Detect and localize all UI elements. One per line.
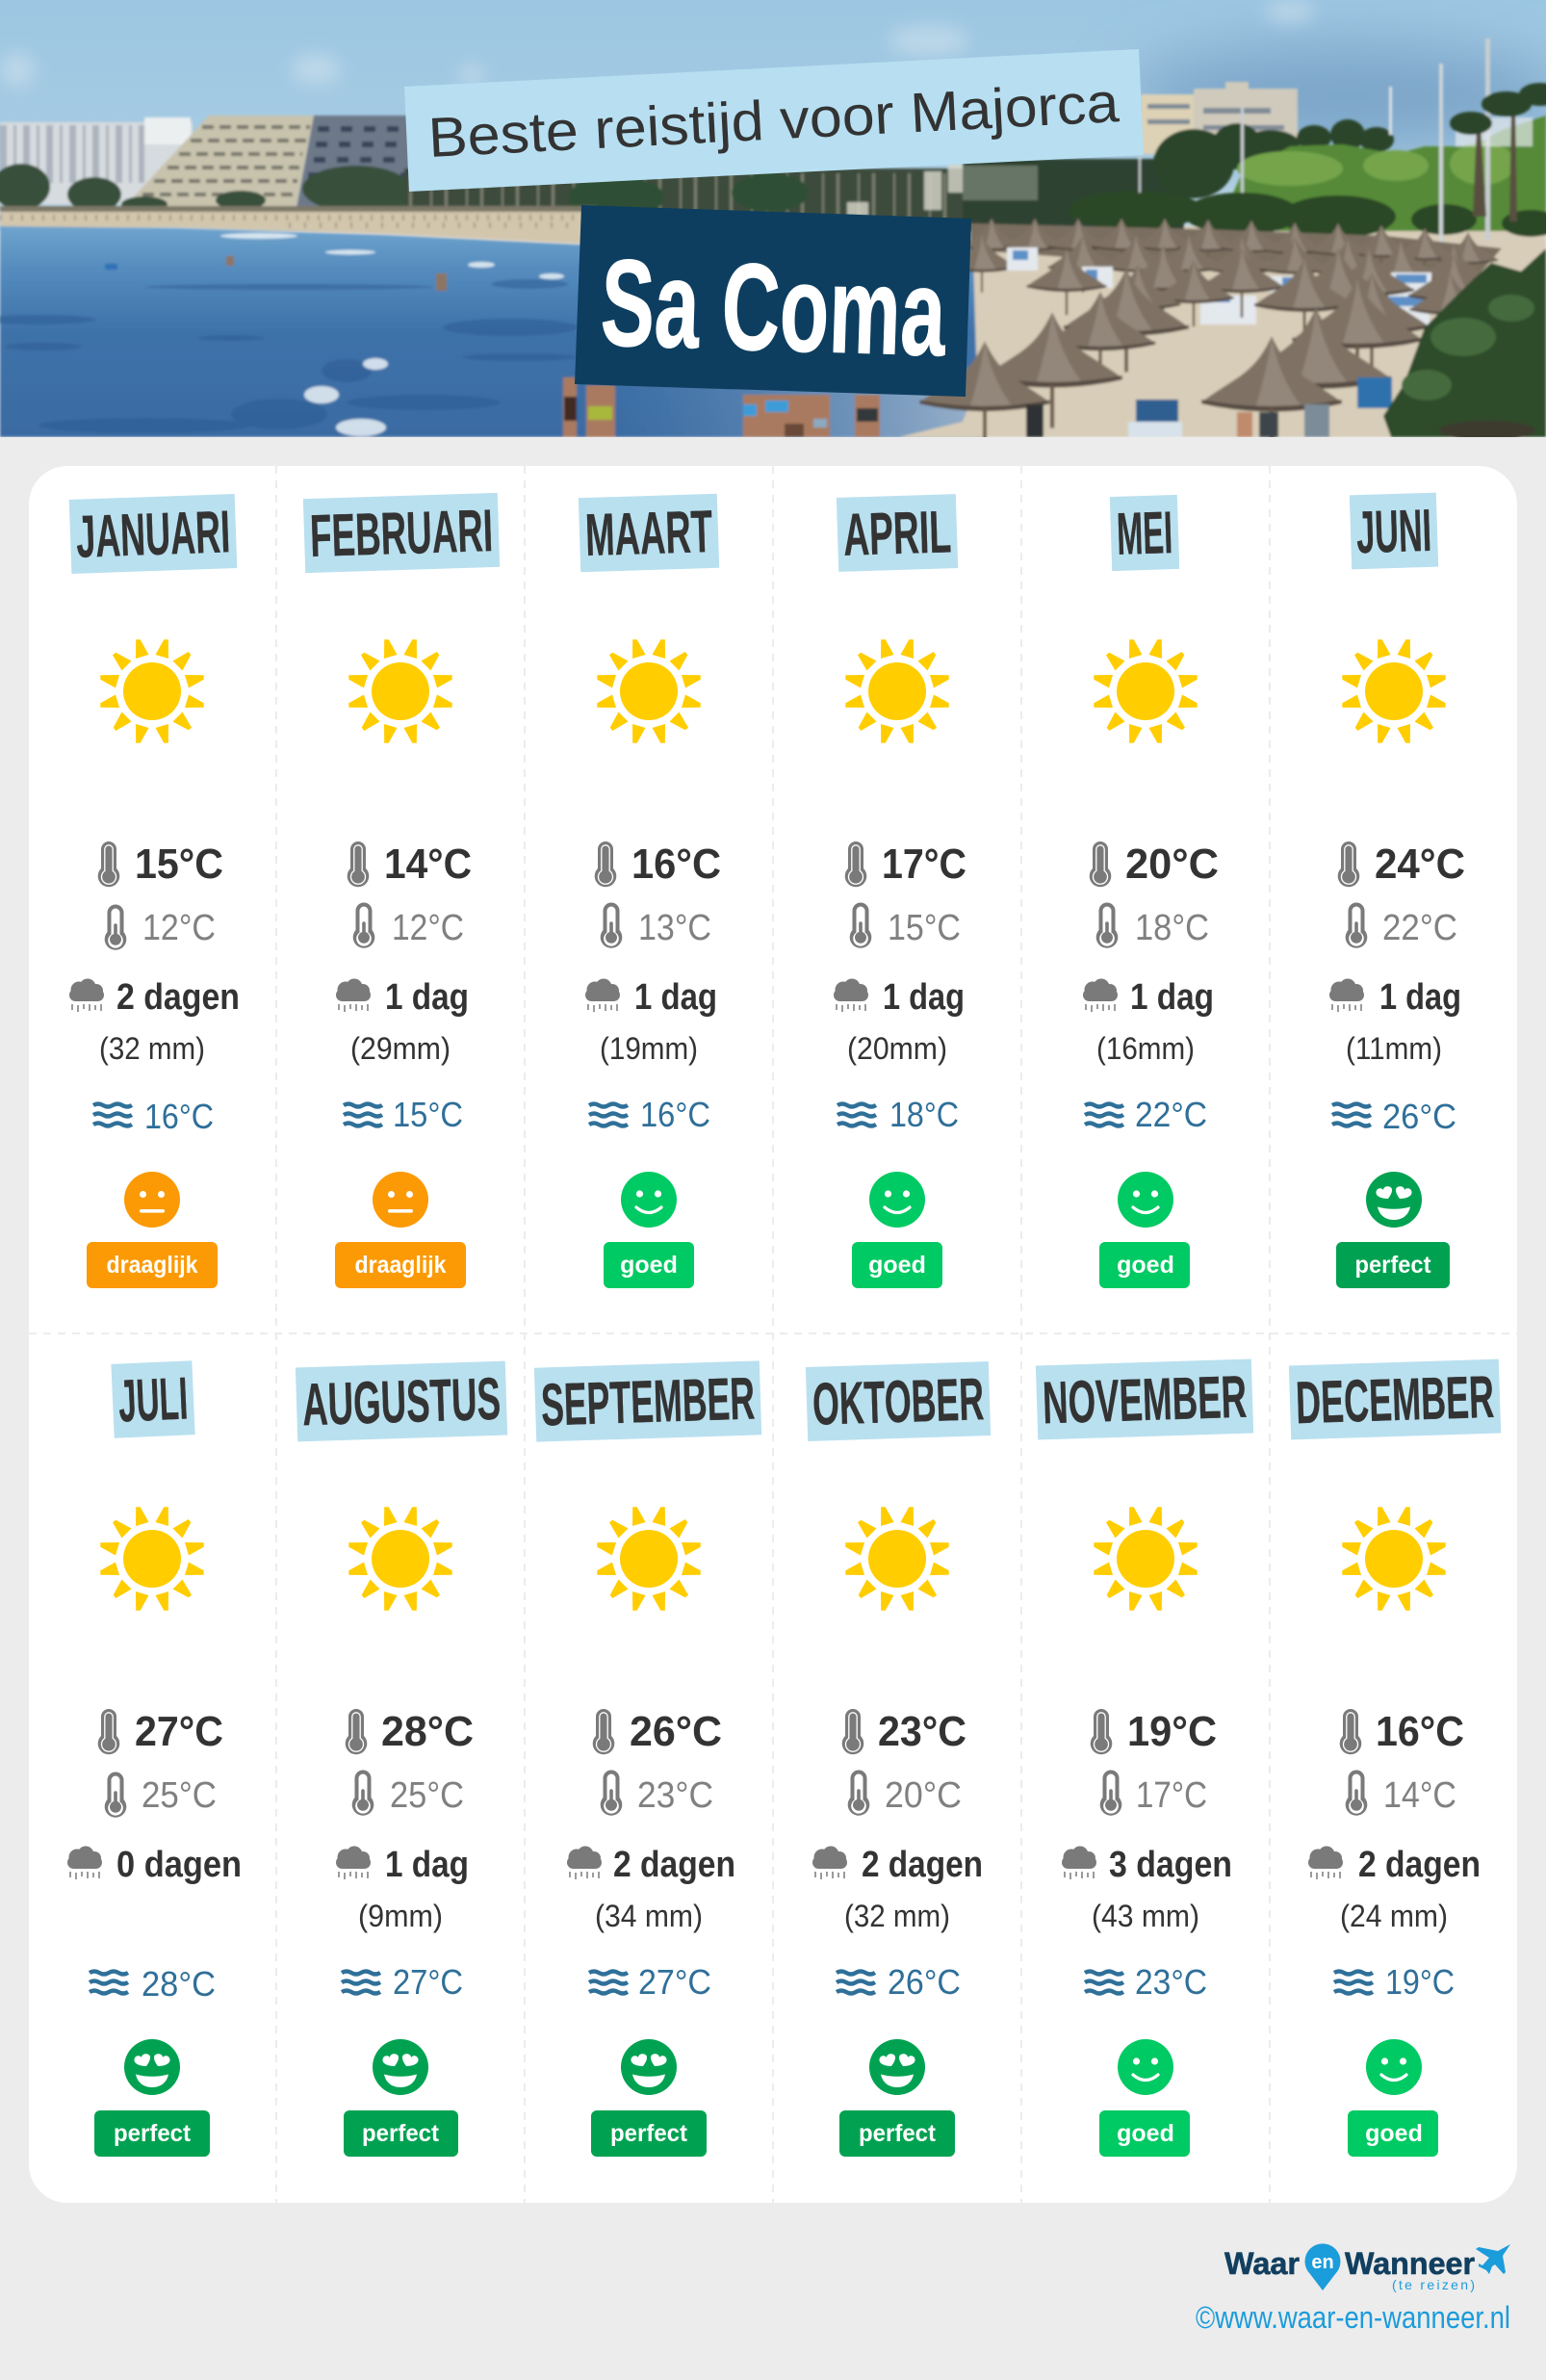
min temperature: 23°C — [637, 1775, 713, 1816]
main panel — [29, 466, 1517, 2203]
rating: goed — [852, 1172, 942, 1288]
rainfall: (32 mm) — [844, 1899, 950, 1933]
sea temperature: 28°C — [142, 1964, 216, 2004]
rating: draaglijk: draaglijk — [106, 1252, 198, 1279]
icon: map pin — [1305, 2243, 1340, 2290]
month label: JANUARI — [75, 499, 231, 571]
month label: FEBRUARI — [309, 498, 494, 570]
sea temperature — [837, 1962, 961, 2002]
min temperature — [850, 903, 961, 948]
people — [563, 377, 880, 437]
month label: JUNI — [1355, 498, 1432, 566]
month: juni — [1329, 493, 1465, 1288]
logo: Waar en Wanneer: (te reizen) — [1392, 2277, 1475, 2292]
rain days: 1 dag — [1379, 977, 1461, 1018]
rating: perfect — [591, 2039, 707, 2157]
title banner: Beste reistijd voor Majorca — [426, 71, 1121, 169]
icon: sun — [845, 1507, 949, 1611]
beach — [0, 212, 597, 245]
icon: map pin: en — [1311, 2252, 1334, 2273]
rating: perfect: perfect — [610, 2120, 688, 2147]
sea temperature — [1334, 1962, 1455, 2002]
rain days — [812, 1845, 983, 1885]
min temperature — [352, 1770, 464, 1816]
max temperature — [842, 1708, 966, 1755]
month: december — [1289, 1359, 1501, 2157]
icon: sun — [100, 1507, 204, 1611]
rain days: 1 dag — [385, 977, 469, 1018]
month label — [534, 1360, 761, 1442]
sea temperature — [589, 1095, 710, 1134]
rain days — [834, 977, 965, 1018]
month: september — [534, 1360, 761, 2157]
max temperature: 14°C — [384, 841, 472, 888]
sea temperature — [589, 1962, 711, 2002]
month label: AUGUSTUS — [301, 1366, 502, 1438]
rating: perfect — [94, 2039, 210, 2157]
min temperature: 22°C — [1382, 908, 1457, 948]
month label — [296, 1361, 507, 1441]
max temperature — [98, 841, 223, 888]
hotels left — [0, 122, 193, 204]
rating: perfect — [1336, 1172, 1450, 1288]
location banner: Sa Coma — [575, 205, 971, 397]
sea temperature: 18°C — [889, 1095, 959, 1134]
rating: goed: goed — [1117, 1252, 1174, 1279]
rating: draaglijk: draaglijk — [354, 1252, 447, 1279]
rating: perfect: perfect — [1355, 1252, 1431, 1279]
rating: goed — [1348, 2039, 1438, 2157]
min temperature — [848, 1770, 962, 1816]
sea temperature: 22°C — [1135, 1095, 1207, 1134]
month label — [837, 494, 958, 572]
sea — [0, 226, 992, 437]
min temperature: 20°C — [885, 1775, 962, 1816]
max temperature: 19°C — [1127, 1708, 1217, 1755]
rain days: 2 dagen — [1358, 1845, 1481, 1885]
logo: Waar en Wanneer — [1224, 2243, 1510, 2292]
rainfall: (16mm) — [1096, 1031, 1195, 1066]
rain days — [1308, 1845, 1481, 1885]
min temperature — [601, 1770, 713, 1816]
rain days: 3 dagen — [1109, 1845, 1232, 1885]
min temperature: 18°C — [1135, 908, 1209, 948]
max temperature: 16°C — [631, 841, 721, 888]
sea temperature: 27°C — [393, 1962, 463, 2002]
sea temperature: 16°C — [144, 1097, 214, 1136]
rating: perfect — [839, 2039, 955, 2157]
min temperature — [1100, 1770, 1207, 1816]
rating: draaglijk — [335, 1172, 466, 1288]
rain days — [67, 1845, 242, 1885]
max temperature: 26°C — [630, 1708, 722, 1755]
max temperature: 20°C — [1125, 841, 1219, 888]
rain days — [336, 977, 469, 1018]
month label: NOVEMBER — [1042, 1364, 1248, 1436]
rain days — [1062, 1845, 1232, 1885]
icon: sun — [1094, 639, 1198, 743]
max temperature: 15°C — [135, 841, 223, 888]
max temperature — [595, 841, 721, 888]
min temperature: 13°C — [638, 908, 711, 948]
month: februari — [303, 493, 500, 1288]
min temperature — [105, 1772, 217, 1818]
min temperature: 14°C — [1383, 1775, 1456, 1816]
rain days — [567, 1845, 735, 1885]
rating: goed: goed — [1117, 2120, 1174, 2147]
month: januari — [69, 494, 240, 1288]
sea temperature: 26°C — [1382, 1097, 1456, 1136]
max temperature — [1338, 841, 1465, 888]
header photo: beach of Sa Coma — [0, 0, 1546, 453]
sea temperature: 23°C — [1135, 1962, 1207, 2002]
max temperature — [845, 841, 966, 888]
building and trees right — [899, 226, 1546, 437]
icon: sun — [845, 639, 949, 743]
sea temperature — [837, 1095, 959, 1134]
rain days: 1 dag — [1130, 977, 1214, 1018]
rain days — [585, 977, 717, 1018]
parasol mass — [970, 223, 1502, 281]
rain days: 2 dagen — [862, 1845, 983, 1885]
icon: sun — [1342, 1507, 1446, 1611]
min temperature — [353, 903, 464, 948]
month: april — [834, 494, 966, 1288]
icon: sun — [1342, 639, 1446, 743]
title banner — [404, 49, 1144, 192]
rainfall: (9mm) — [358, 1899, 443, 1933]
max temperature — [1091, 1708, 1217, 1755]
max temperature — [1340, 1708, 1464, 1755]
month: november — [1036, 1359, 1253, 2157]
max temperature: 16°C — [1376, 1708, 1464, 1755]
min temperature: 17°C — [1136, 1775, 1207, 1816]
sea temperature: 15°C — [393, 1095, 463, 1134]
rain days: 2 dagen — [116, 977, 240, 1018]
sea temperature: 26°C — [888, 1962, 961, 2002]
palm strip behind banner — [404, 168, 1174, 226]
month label — [303, 493, 500, 573]
sea temperature — [90, 1964, 216, 2004]
rating: draaglijk — [87, 1172, 218, 1288]
rainfall: (43 mm) — [1092, 1899, 1199, 1933]
sea temperature — [1085, 1095, 1207, 1134]
sea temperature — [344, 1095, 463, 1134]
month label — [1350, 493, 1438, 569]
icon: sun — [597, 639, 701, 743]
max temperature: 28°C — [381, 1708, 474, 1755]
sea temperature: 16°C — [640, 1095, 710, 1134]
max temperature — [348, 841, 472, 888]
rating: goed: goed — [620, 1252, 678, 1279]
min temperature: 25°C — [390, 1775, 464, 1816]
month: augustus — [296, 1361, 507, 2157]
rainfall: (11mm) — [1346, 1031, 1442, 1066]
rating: goed: goed — [868, 1252, 926, 1279]
rain days: 1 dag — [385, 1845, 469, 1885]
rain days: 2 dagen — [613, 1845, 735, 1885]
min temperature — [105, 905, 216, 950]
rain days — [1083, 977, 1214, 1018]
sea temperature — [1332, 1097, 1456, 1136]
month: oktober — [806, 1361, 991, 2157]
month: maart — [579, 494, 721, 1288]
min temperature: 12°C — [142, 908, 216, 948]
icon: sun — [597, 1507, 701, 1611]
month label: MAART — [584, 499, 713, 569]
month label: OKTOBER — [812, 1366, 985, 1438]
rainfall: (20mm) — [847, 1031, 947, 1066]
max temperature: 27°C — [135, 1708, 223, 1755]
max temperature — [98, 1708, 223, 1755]
min temperature — [601, 903, 711, 948]
rain days — [69, 977, 240, 1018]
month label: JULI — [117, 1365, 190, 1436]
month label — [1036, 1359, 1253, 1439]
rainfall: (29mm) — [350, 1031, 451, 1066]
rain days: 1 dag — [883, 977, 965, 1018]
month label — [111, 1360, 195, 1438]
month: juli — [67, 1360, 242, 2157]
month label — [806, 1361, 991, 1441]
month label: APRIL — [842, 499, 952, 569]
rainfall: (19mm) — [600, 1031, 698, 1066]
rating: perfect: perfect — [362, 2120, 440, 2147]
max temperature: 23°C — [878, 1708, 966, 1755]
rainfall: (32 mm) — [99, 1031, 205, 1066]
icon: airplane — [1476, 2244, 1510, 2274]
sea temperature — [342, 1962, 463, 2002]
month label — [69, 494, 237, 574]
rainfall: (24 mm) — [1340, 1899, 1448, 1933]
rating: goed — [1099, 2039, 1190, 2157]
rating: goed — [604, 1172, 694, 1288]
logo: Waar en Wanneer: Wanneer — [1345, 2246, 1475, 2281]
bush right — [1383, 248, 1546, 437]
rain days — [1329, 977, 1461, 1018]
min temperature: 25°C — [142, 1775, 217, 1816]
month label: SEPTEMBER — [540, 1366, 756, 1438]
max temperature: 24°C — [1375, 841, 1465, 888]
location banner: Sa Coma: Sa Coma — [599, 234, 948, 382]
icon: sun — [100, 639, 204, 743]
month label — [1110, 495, 1179, 571]
rain days: 1 dag — [634, 977, 717, 1018]
min temperature — [1096, 903, 1209, 948]
rating: goed — [1099, 1172, 1190, 1288]
rating: perfect — [344, 2039, 458, 2157]
rain days: 0 dagen — [116, 1845, 242, 1885]
logo: Waar en Wanneer: Waar — [1224, 2246, 1300, 2281]
rainfall: (34 mm) — [595, 1899, 703, 1933]
month: mei — [1083, 495, 1219, 1288]
sea temperature — [93, 1097, 214, 1136]
icon: sun — [348, 639, 452, 743]
rating: perfect: perfect — [859, 2120, 937, 2147]
sea temperature: 19°C — [1385, 1962, 1455, 2002]
rating: goed: goed — [1365, 2120, 1423, 2147]
icon: sun — [348, 1507, 452, 1611]
min temperature — [1346, 1770, 1456, 1816]
rating: perfect: perfect — [114, 2120, 192, 2147]
sea temperature: 27°C — [638, 1962, 711, 2002]
min temperature: 12°C — [392, 908, 464, 948]
min temperature — [1346, 903, 1457, 948]
month label — [579, 494, 719, 572]
min temperature: 15°C — [888, 908, 961, 948]
month label: MEI — [1116, 500, 1173, 568]
sea temperature — [1085, 1962, 1207, 2002]
max temperature: 17°C — [882, 841, 966, 888]
rain days — [336, 1845, 469, 1885]
icon: sun — [1094, 1507, 1198, 1611]
